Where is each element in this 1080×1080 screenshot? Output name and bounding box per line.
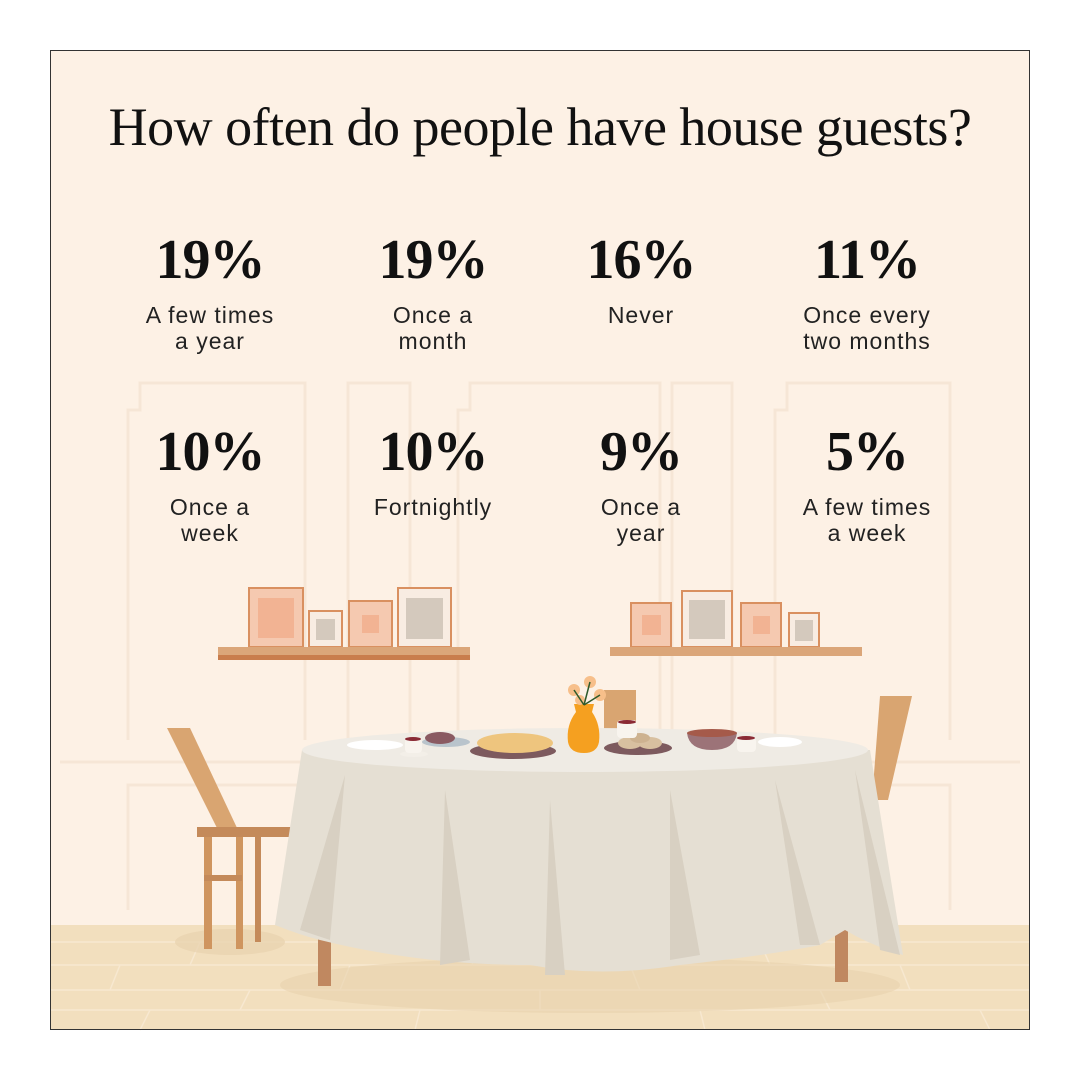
stat: 10% once a week: Once a [170,494,250,520]
stat: 19% once a month: Once a [393,302,473,328]
stat: 10% fortnightly: Fortnightly [374,494,492,520]
chairs [167,690,912,949]
stat: 5% a few times a week: a week [828,520,906,546]
stat: 19% once a month [378,229,488,354]
shelf left with frames [218,588,470,660]
stat: 10% once a week: 10% [156,421,264,483]
stat: 19% a few times a year [146,229,274,354]
stat: 9% once a year: Once a [601,494,681,520]
stat: 11% once every two months: two months [803,328,931,354]
stat: 5% a few times a week: 5% [826,421,908,483]
stat: 11% once every two months [803,229,931,354]
floor [50,925,1030,1030]
stat: 9% once a year [600,421,682,546]
stat: 19% a few times a year: a year [175,328,245,354]
stat: 16% never [586,229,696,328]
stat: 19% a few times a year: A few times [146,302,274,328]
stat: 11% once every two months: Once every [803,302,931,328]
stat: 10% once a week: week [181,520,239,546]
stat: 19% once a month: 19% [378,229,488,291]
stat: 9% once a year: 9% [600,421,682,483]
stat: 16% never: Never [608,302,674,328]
table [275,728,903,986]
stat: 9% once a year: year [617,520,665,546]
stat: 16% never: 16% [586,229,696,291]
stat: 19% once a month: month [399,328,467,354]
stat: 19% a few times a year: 19% [156,229,264,291]
vase with flowers [568,676,606,753]
stat: 10% once a week [156,421,264,546]
food on table [347,720,802,759]
title: How often do people have house guests? [109,97,971,157]
shelf right with frames [610,591,862,656]
stat: 5% a few times a week: A few times [803,494,931,520]
stat: 5% a few times a week [802,421,931,546]
stat: 10% fortnightly: 10% [378,421,488,483]
stat: 11% once every two months: 11% [814,229,920,291]
stat: 10% fortnightly [374,421,492,520]
